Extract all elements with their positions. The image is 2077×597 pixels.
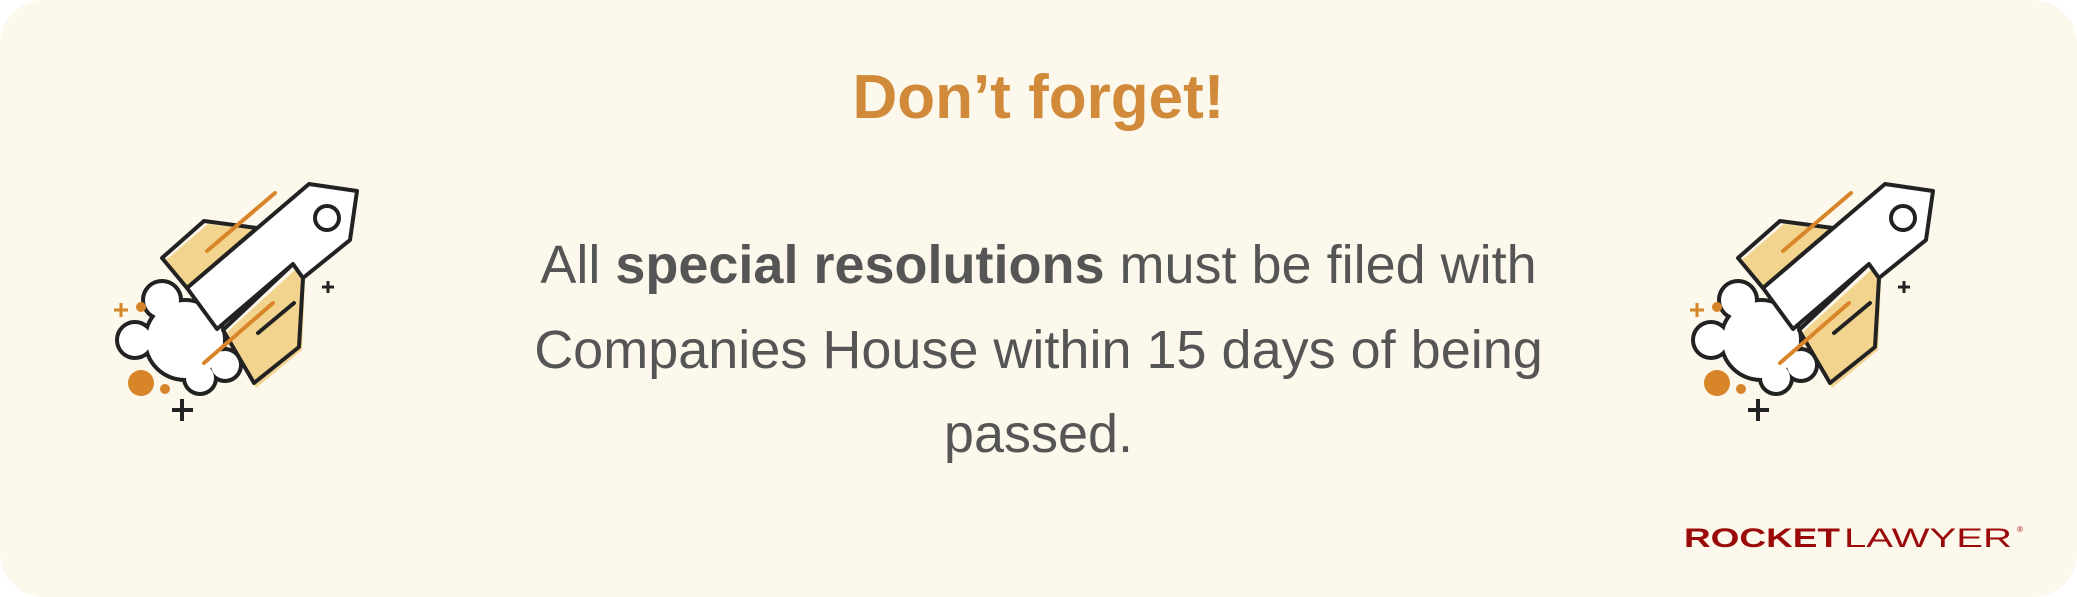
- logo: Rocket Lawyer: [1684, 524, 2023, 553]
- body text: All special resolutions must be filed with: [540, 235, 1537, 295]
- logo: Rocket Lawyer: LAWYER: [1844, 524, 2012, 553]
- body text: passed.: [944, 404, 1133, 464]
- title: Don’t forget!: [853, 63, 1224, 132]
- logo: Rocket Lawyer: ROCKET: [1684, 524, 1841, 553]
- icon: rocket left: [114, 182, 359, 421]
- body text: Companies House within 15 days of being: [534, 320, 1543, 380]
- body text: [534, 235, 1543, 464]
- logo: Rocket Lawyer: ®: [2017, 525, 2023, 534]
- icon: rocket right: [1690, 182, 1935, 421]
